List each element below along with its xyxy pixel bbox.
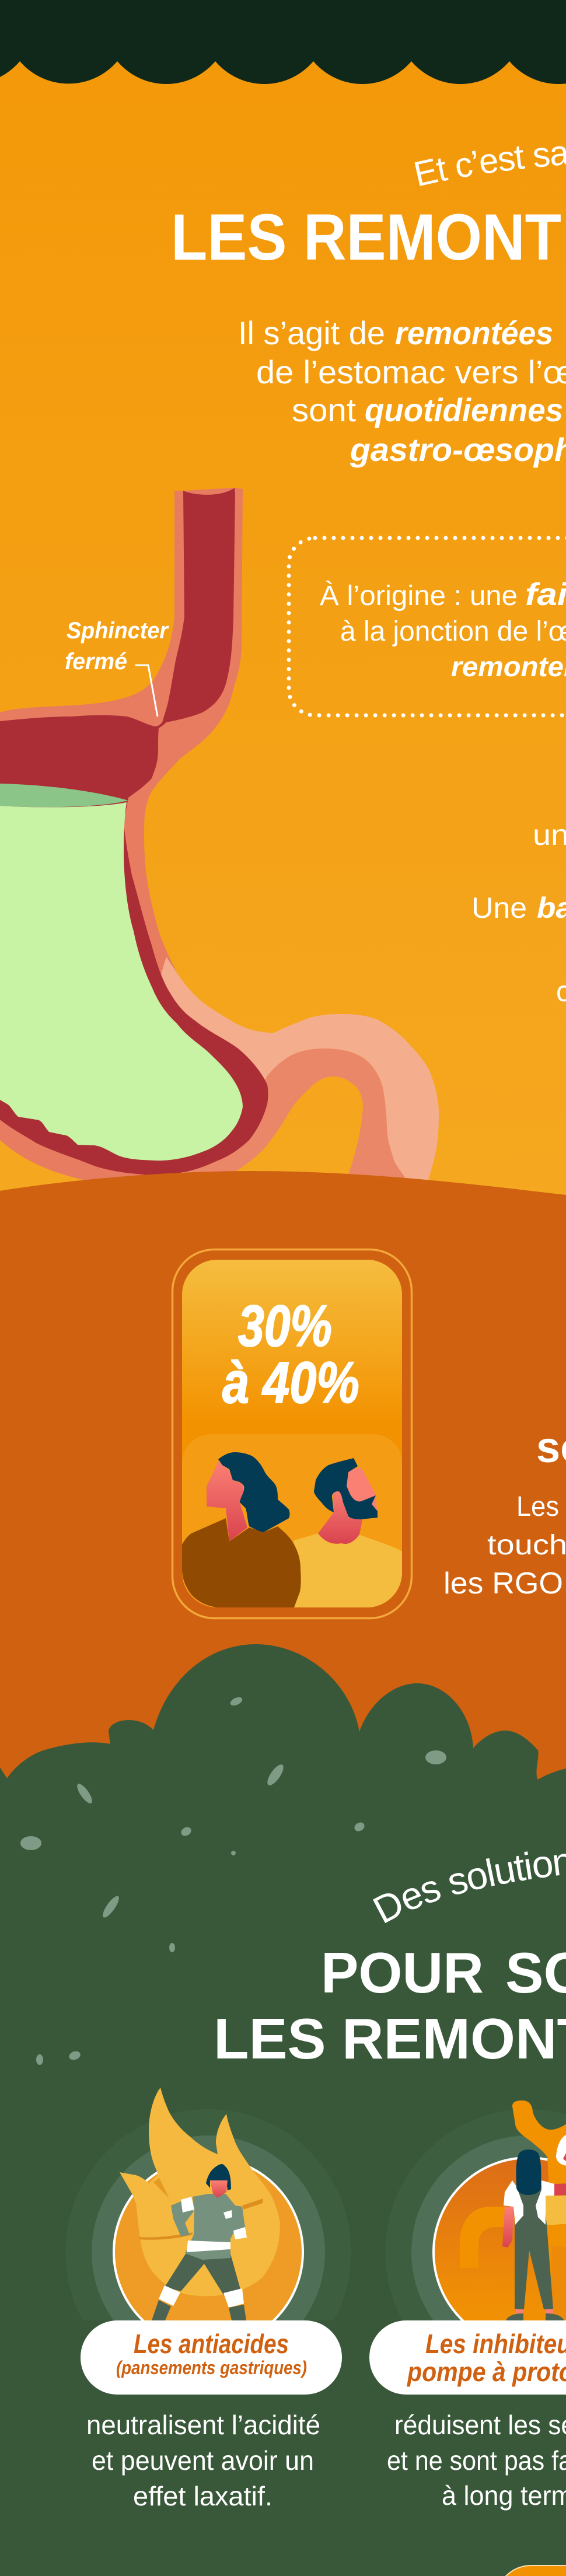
illustration: man and woman: [182, 1434, 402, 1627]
specks: decorative bubbles: [20, 1696, 446, 2065]
text block: definition: sont: [292, 392, 356, 428]
woman: [502, 2149, 564, 2320]
heading: section one title: [171, 146, 566, 274]
pill text: [406, 2329, 566, 2387]
firefighter: [152, 2164, 247, 2320]
text block: definition: gastro-œsoph: [350, 431, 566, 468]
statistic: percentage: 30%: [238, 1294, 332, 1359]
woman: [182, 1452, 301, 1607]
description: [86, 2410, 320, 2511]
text block: definition: remontées: [395, 314, 553, 351]
title line one: [321, 1941, 566, 2005]
text block: statistic description: touch: [487, 1530, 566, 1561]
callout: dotted box: [289, 538, 566, 715]
description: neutralisent l’acidité: [86, 2410, 320, 2440]
pill: label: [369, 2320, 566, 2395]
background arch: [460, 2207, 513, 2268]
illustration: stomach cross-section: [0, 488, 439, 1182]
text block: definition: de l’estomac vers l’œ: [256, 354, 566, 390]
text block: statistic description: les RGO: [443, 1567, 563, 1600]
pill text: Les antiacides: [134, 2329, 289, 2359]
stomach inner lining: [0, 488, 268, 1175]
text block: definition: quotidiennes: [365, 392, 563, 428]
heading: solutions title: [214, 1851, 566, 2071]
pill text: (pansements gastriques): [116, 2357, 307, 2378]
callout: dotted box: fai: [525, 577, 566, 612]
man: [294, 1458, 402, 1607]
duodenum outer band: [158, 957, 439, 1182]
title line one: POUR: [321, 1941, 484, 2005]
label: sphincter: Sphincter: [67, 618, 169, 644]
header: dark scalloped band: [0, 0, 566, 84]
icon: disc and firefighter: [92, 2088, 325, 2320]
description: effet laxatif.: [133, 2481, 272, 2511]
description: [387, 2410, 566, 2511]
stomach acid: [0, 802, 243, 1161]
text block: causes list: un: [533, 819, 566, 851]
background: orange section: [0, 0, 566, 1225]
background: green bush section: [0, 1644, 566, 2576]
text block: causes list: [471, 819, 566, 1008]
subtitle: curved intro: Et c’est sa: [414, 146, 566, 186]
panel: next card top edge: [496, 2565, 566, 2576]
text block: definition: [238, 314, 566, 468]
pill on stomach: [556, 2134, 566, 2166]
acid surface: [0, 784, 128, 807]
text block: definition: Il s’agit de: [238, 314, 385, 351]
card fill: [182, 1260, 402, 1607]
text block: statistic description: [443, 1423, 566, 1600]
text block: causes list: Une: [471, 892, 527, 924]
panel: inhibiteurs: [369, 2100, 566, 2511]
stomach outer wall: [0, 488, 243, 1180]
stomach shape: [512, 2100, 566, 2278]
duodenum inner band: [175, 1048, 408, 1182]
card outline: [173, 1250, 412, 1619]
background: brown hill section: [0, 1171, 566, 1809]
label: sphincter: fermé: [65, 649, 127, 674]
pill text: [116, 2329, 307, 2378]
statistic: percentage: [222, 1294, 359, 1415]
icon: disc and woman with stomach: [411, 2100, 566, 2320]
flames: [120, 2088, 280, 2296]
panel: statistic card: [173, 1250, 412, 1627]
label: sphincter: [65, 618, 169, 716]
description: et peuvent avoir un: [92, 2445, 314, 2476]
callout: dotted box: À l’origine : une: [320, 581, 518, 611]
statistic: percentage: à 40%: [222, 1350, 359, 1415]
panel: antiacides: [65, 2088, 351, 2511]
text block: statistic description: Les: [516, 1491, 559, 1522]
pill: label: [81, 2320, 342, 2395]
